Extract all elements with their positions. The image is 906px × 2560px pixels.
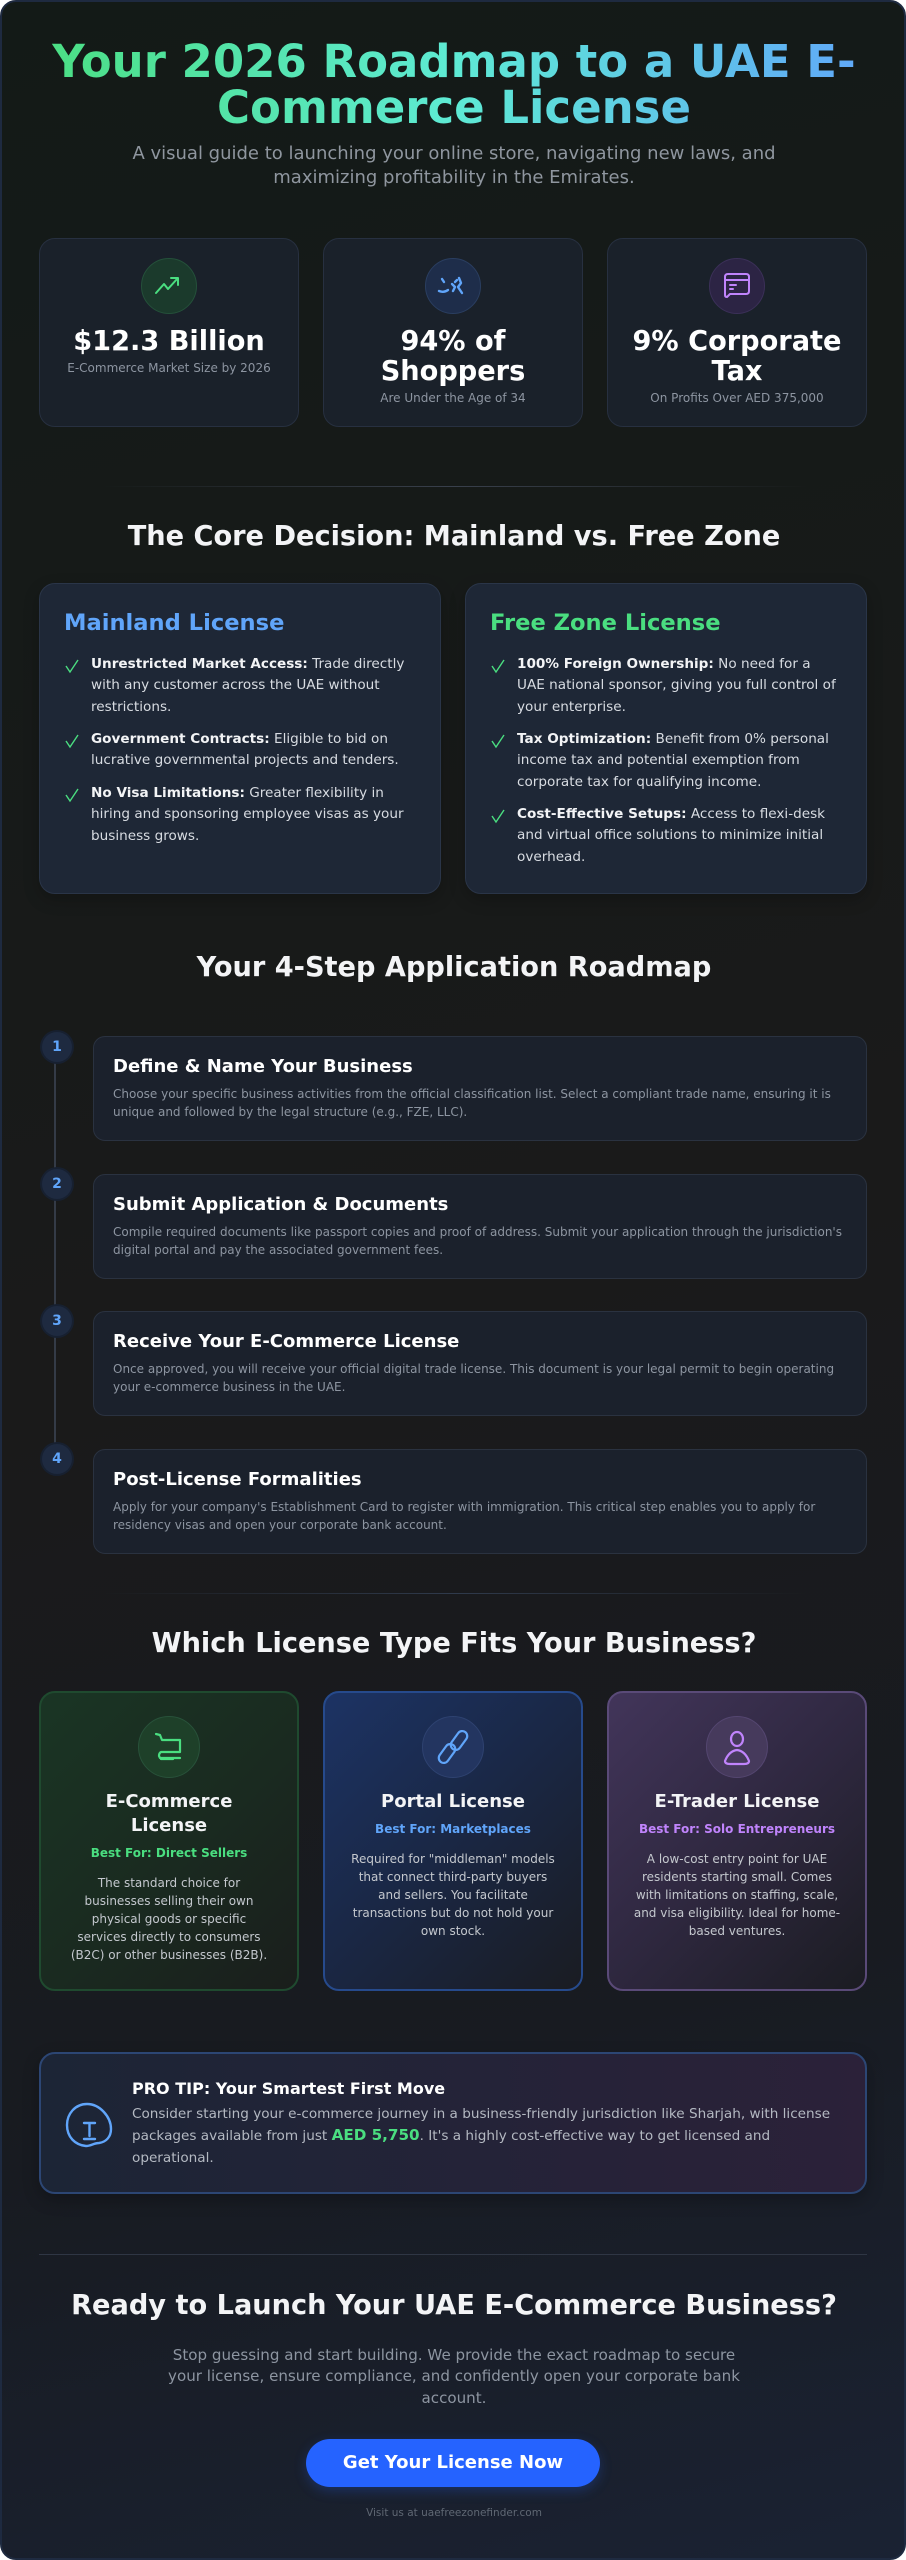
benefit text: UAE national sponsor, giving you full control of	[517, 677, 836, 693]
step number 4: 4	[52, 1451, 62, 1467]
panel: stat market size	[39, 238, 299, 427]
step title: Post-License Formalities	[113, 1469, 362, 1490]
description: physical goods or specific	[92, 1912, 246, 1926]
best for: Best For: Marketplaces	[375, 1822, 531, 1836]
step number 4	[42, 1444, 72, 1474]
step description: Choose your specific business activities from the official classification list. Select a compliant trade name, ensuring it is	[113, 1087, 831, 1101]
panel: stat shoppers	[323, 238, 583, 427]
license title: Portal License	[381, 1791, 525, 1812]
description: A low-cost entry point for UAE	[647, 1852, 827, 1866]
step number 1: 1	[52, 1039, 62, 1055]
best for: Best For: Solo Entrepreneurs	[639, 1822, 835, 1836]
license title: E-Trader License	[655, 1791, 819, 1812]
benefit text	[91, 785, 404, 844]
license title: E-Commerce	[106, 1791, 232, 1812]
icon: receipt card	[709, 258, 765, 314]
best for: Best For: Direct Sellers	[91, 1846, 247, 1860]
benefit text: overhead.	[517, 849, 585, 865]
panel heading: Free Zone License	[490, 610, 721, 636]
tip text: packages available from just AED 5,750. It's a highly cost-effective way to get licensed and	[132, 2126, 770, 2144]
stat value	[632, 326, 842, 387]
step 3 card	[93, 1311, 867, 1416]
title: Commerce License	[217, 81, 691, 134]
stat value: 9% Corporate	[632, 326, 842, 357]
subtitle: A visual guide to launching your online store, navigating new laws, and	[132, 143, 776, 164]
step description	[113, 1500, 816, 1532]
benefit text: Tax Optimization: Benefit from 0% personal	[517, 731, 829, 747]
benefit text: No Visa Limitations: Greater flexibility in	[91, 785, 384, 801]
benefit text: corporate tax for qualifying income.	[517, 774, 761, 790]
step description: residency visas and open your corporate bank account.	[113, 1518, 447, 1532]
step description: unique and followed by the legal structure (e.g., FZE, LLC).	[113, 1105, 467, 1119]
stat value	[381, 326, 525, 387]
benefit text: Unrestricted Market Access: Trade directly	[91, 656, 404, 672]
panel: stat corporate tax	[607, 238, 867, 427]
panel heading: Mainland License	[64, 610, 284, 636]
benefit text: your enterprise.	[517, 699, 626, 715]
step 2 card	[93, 1174, 867, 1279]
description: The standard choice for	[98, 1876, 240, 1890]
description: based ventures.	[689, 1924, 785, 1938]
title: Your 2026 Roadmap to a UAE E-	[52, 35, 856, 88]
step description: your e-commerce business in the UAE.	[113, 1380, 345, 1394]
call to action text	[168, 2346, 740, 2407]
benefit text: with any customer across the UAE without	[91, 677, 380, 693]
description	[351, 1852, 555, 1938]
stat value: Tax	[712, 356, 762, 387]
benefit: setups	[492, 806, 825, 865]
step description: digital portal and pay the associated government fees.	[113, 1243, 443, 1257]
stat value: Shoppers	[381, 356, 525, 387]
icon: check	[66, 734, 78, 748]
benefit text	[517, 656, 836, 715]
icon: check	[492, 734, 504, 748]
benefit text	[517, 806, 825, 865]
benefit text: hiring and sponsoring employee visas as your	[91, 806, 404, 822]
icon: trending up	[141, 258, 197, 314]
benefit text: 100% Foreign Ownership: No need for a	[517, 656, 811, 672]
button: get license	[306, 2439, 600, 2487]
stat caption: On Profits Over AED 375,000	[650, 391, 824, 405]
step description: Compile required documents like passport copies and proof of address. Submit your application through the jurisdiction's	[113, 1225, 842, 1239]
callout: pro tip	[39, 2052, 867, 2194]
panel: free zone license	[465, 583, 867, 894]
benefit text: and virtual office solutions to minimize initial	[517, 827, 823, 843]
tip text: operational.	[132, 2150, 214, 2166]
button: get license: Get Your License Now	[343, 2452, 563, 2473]
icon: check	[66, 788, 78, 802]
step number 2: 2	[52, 1176, 62, 1192]
icon: link	[422, 1716, 484, 1778]
description	[634, 1852, 840, 1938]
description: that connect third-party buyers	[359, 1870, 547, 1884]
description: Required for "middleman" models	[351, 1852, 555, 1866]
step description: Apply for your company's Establishment Card to register with immigration. This critical step enables you to apply for	[113, 1500, 815, 1514]
icon: person	[706, 1716, 768, 1778]
description: and sellers. You facilitate	[378, 1888, 528, 1902]
benefit text: income tax and potential exemption from	[517, 752, 800, 768]
benefit text: Cost-Effective Setups: Access to flexi-desk	[517, 806, 825, 822]
panel: e-trader license	[607, 1691, 867, 1991]
description: services directly to consumers	[77, 1930, 261, 1944]
icon: users	[425, 258, 481, 314]
benefit: tax	[492, 731, 829, 790]
benefit text	[517, 731, 829, 790]
stat value: $12.3 Billion	[73, 326, 265, 357]
step number 2	[42, 1169, 72, 1199]
footer: Visit us at uaefreezonefinder.com	[366, 2507, 542, 2519]
benefit: contracts	[66, 731, 399, 768]
call to action text: account.	[422, 2389, 486, 2407]
heading: license type: Which License Type Fits Your Business?	[152, 1628, 756, 1659]
benefit text: lucrative governmental projects and tenders.	[91, 752, 399, 768]
subtitle: maximizing profitability in the Emirates.	[273, 167, 635, 188]
panel: portal license	[323, 1691, 583, 1991]
title	[25, 39, 883, 131]
timeline connector	[54, 1032, 56, 1462]
stat caption: Are Under the Age of 34	[380, 391, 526, 405]
step 1 card	[93, 1036, 867, 1141]
tip text: Consider starting your e-commerce journey in a business-friendly jurisdiction like Sharjah, with license	[132, 2106, 830, 2122]
icon: check	[492, 660, 504, 674]
icon: check	[492, 810, 504, 824]
call to action text: Stop guessing and start building. We provide the exact roadmap to secure	[173, 2346, 735, 2364]
step description	[113, 1087, 831, 1119]
step title: Receive Your E-Commerce License	[113, 1331, 459, 1352]
step title: Define & Name Your Business	[113, 1056, 413, 1077]
tip title: PRO TIP: Your Smartest First Move	[132, 2079, 445, 2098]
description	[71, 1876, 267, 1962]
subtitle	[132, 143, 776, 188]
step description	[113, 1225, 842, 1257]
benefit text: restrictions.	[91, 699, 171, 715]
step 4 card	[93, 1449, 867, 1554]
description: own stock.	[421, 1924, 485, 1938]
description: transactions but do not hold your	[353, 1906, 553, 1920]
call to action text: your license, ensure compliance, and confidently open your corporate bank	[168, 2367, 740, 2385]
step number 3	[42, 1306, 72, 1336]
description: (B2C) or other businesses (B2B).	[71, 1948, 267, 1962]
description: and visa eligibility. Ideal for home-	[634, 1906, 840, 1920]
license title	[106, 1791, 232, 1836]
step number 3: 3	[52, 1313, 62, 1329]
benefit text	[91, 656, 404, 715]
icon: cart	[138, 1716, 200, 1778]
heading: roadmap: Your 4-Step Application Roadmap	[197, 952, 711, 983]
benefit: ownership	[492, 656, 836, 715]
step description	[113, 1362, 834, 1394]
step number 1	[42, 1032, 72, 1062]
step description: Once approved, you will receive your official digital trade license. This document is your legal permit to begin operating	[113, 1362, 834, 1376]
heading: core decision: The Core Decision: Mainland vs. Free Zone	[128, 521, 780, 552]
tip text	[132, 2106, 830, 2166]
stat value: 94% of	[400, 326, 506, 357]
panel: e-commerce license	[39, 1691, 299, 1991]
benefit text: Government Contracts: Eligible to bid on	[91, 731, 388, 747]
icon: lightbulb	[66, 2102, 112, 2148]
description: residents starting small. Comes	[642, 1870, 832, 1884]
panel: mainland license	[39, 583, 441, 894]
license title: License	[131, 1815, 207, 1836]
stat caption: E-Commerce Market Size by 2026	[67, 361, 271, 375]
description: businesses selling their own	[85, 1894, 253, 1908]
benefit: market access	[66, 656, 404, 715]
step title: Submit Application & Documents	[113, 1194, 448, 1215]
benefit: visas	[66, 785, 404, 844]
icon: check	[66, 660, 78, 674]
heading: call to action: Ready to Launch Your UAE E-Commerce Business?	[71, 2290, 837, 2321]
benefit text: business grows.	[91, 828, 199, 844]
description: with limitations on staffing, scale,	[636, 1888, 838, 1902]
benefit text	[91, 731, 399, 768]
